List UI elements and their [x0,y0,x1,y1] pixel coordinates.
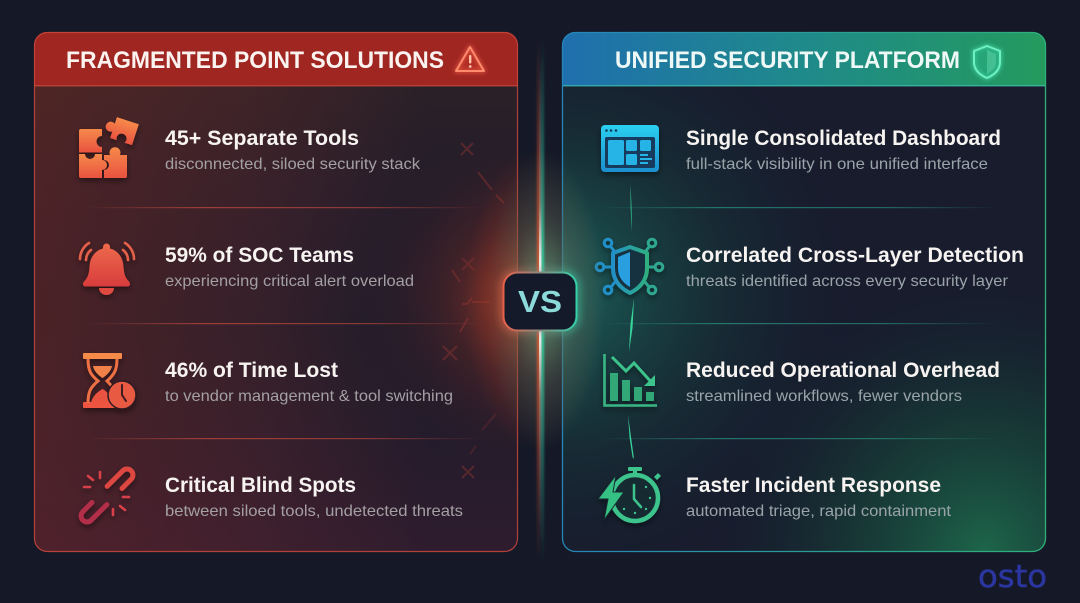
decorative cracks [443,143,504,478]
row: reduced operational overhead: streamlined workflows, fewer vendors [686,388,962,405]
row: 45+ separate tools: disconnected, siloed security stack [165,156,421,173]
row: 45+ separate tools [79,115,421,178]
icon: shield network [596,239,663,294]
row: 59% of SOC teams [80,243,414,295]
text: faster incident response: Faster Incident Response [686,474,941,497]
row: correlated cross-layer detection: threats identified across every security layer [686,273,1009,290]
icon: declining bar chart [604,354,657,406]
row: single consolidated dashboard [601,125,1001,173]
row: 59% of SOC teams: experiencing critical alert overload [165,273,414,290]
icon: alarm bell [80,243,134,295]
row: critical blind spots [79,467,463,524]
row: faster incident response: automated triage, rapid containment [686,503,952,520]
icon: hourglass with clock [83,353,136,409]
heading: unified security platform: UNIFIED SECURITY PLATFORM [615,47,960,74]
VS badge: VS [518,284,562,319]
text: critical blind spots: Critical Blind Spots [165,474,356,497]
text: 59% of SOC teams: 59% of SOC Teams [165,244,354,267]
icon: broken chain link [79,467,135,524]
row: critical blind spots: between siloed tools, undetected threats [165,503,463,520]
heading: fragmented point solutions: FRAGMENTED POINT SOLUTIONS [66,47,444,74]
icon: puzzle pieces [79,115,139,178]
text: correlated cross-layer detection: Correlated Cross-Layer Detection [686,244,1024,267]
icon: dashboard window [601,125,659,172]
logo: osto: osto [978,559,1047,595]
panel: fragmented point solutions [34,32,518,552]
dividers [600,207,1000,208]
row: 46% of time lost [83,353,453,409]
text: reduced operational overhead: Reduced Operational Overhead [686,359,1000,382]
text: 45+ separate tools: 45+ Separate Tools [165,127,359,150]
row: 46% of time lost: to vendor management & tool switching [165,388,453,405]
connector strokes between icons [628,184,634,459]
panel: unified security platform [562,32,1046,552]
row: reduced operational overhead [604,354,1000,406]
icon: glowing shield [974,46,1000,78]
text: single consolidated dashboard: Single Consolidated Dashboard [686,127,1001,150]
dividers [85,207,485,208]
VS badge [503,272,577,331]
icon: stopwatch with lightning [598,467,661,521]
center glowing divider [465,40,606,560]
row: faster incident response [598,467,952,521]
row: correlated cross-layer detection [596,239,1024,294]
text: 46% of time lost: 46% of Time Lost [165,359,338,382]
row: single consolidated dashboard: full-stack visibility in one unified interface [686,156,988,173]
icon: warning triangle [456,47,484,71]
